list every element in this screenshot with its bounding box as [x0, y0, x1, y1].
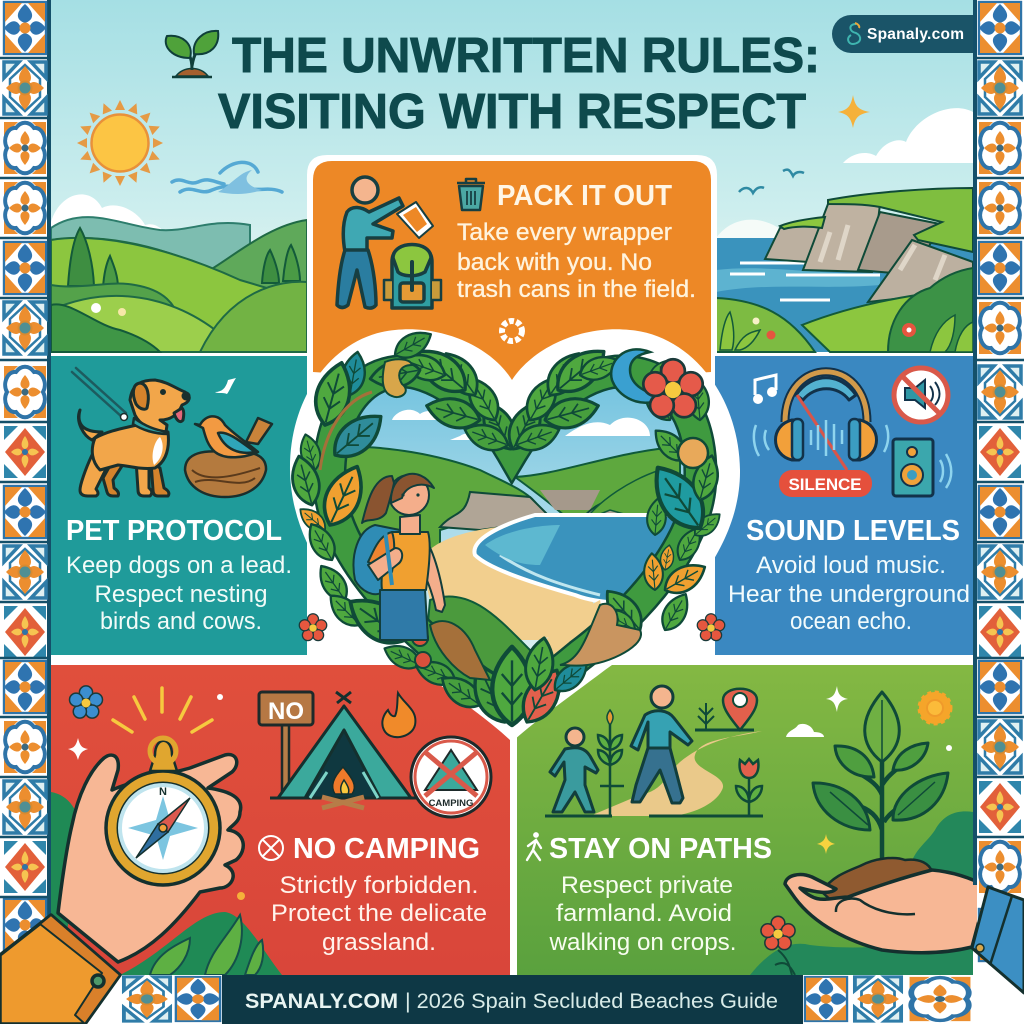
panel: pet protocol: birds and cows.	[100, 608, 262, 635]
panel: no camping: Protect the delicate	[271, 900, 487, 927]
icon: orange sun	[919, 692, 951, 724]
water	[474, 515, 700, 603]
icon: bottom flower	[761, 916, 795, 975]
wreath band	[329, 371, 700, 705]
icon: red flower	[299, 614, 327, 641]
panel: no camping: NO CAMPING	[293, 833, 480, 865]
icon: flower blue	[70, 686, 102, 718]
panel: pet protocol: Respect nesting	[94, 581, 268, 608]
wreath leaves	[287, 325, 725, 730]
icon: no camping badge: CAMPING	[429, 798, 473, 809]
panel: stay on paths: walking on crops.	[549, 929, 736, 956]
icon: crossed circle	[259, 836, 283, 860]
compass needle	[128, 786, 198, 860]
icon: trash can	[457, 179, 485, 210]
icon: open hand	[785, 870, 988, 953]
panel: sound levels: SOUND LEVELS	[746, 515, 960, 547]
panel: stay on paths: Respect private	[561, 872, 733, 899]
icon: tent	[270, 692, 420, 798]
foreground bush	[428, 596, 530, 672]
panel: stay on paths	[517, 665, 988, 975]
title: VISITING WITH RESPECT	[218, 85, 806, 139]
icon: hand with compass	[58, 738, 243, 962]
icon: shell	[383, 359, 412, 397]
icon: star	[838, 95, 870, 128]
panel: no camping: grassland.	[322, 929, 436, 956]
title	[218, 29, 820, 139]
panel: pet protocol: Keep dogs on a lead.	[66, 552, 292, 579]
cliffs	[440, 492, 553, 530]
compass rays	[113, 688, 212, 732]
compass needle: N	[159, 786, 167, 798]
icon: blue sleeve	[972, 887, 1024, 993]
icon: person and backpack	[337, 177, 441, 308]
right foreground	[716, 298, 815, 352]
icon: red flower right	[697, 614, 725, 641]
right clouds	[843, 108, 973, 163]
icon: flower mark	[502, 321, 522, 341]
sparkles and cloud	[826, 686, 848, 712]
sand	[427, 527, 594, 640]
panel: sound levels: Hear the underground	[728, 581, 970, 608]
icon: sun	[77, 100, 163, 186]
panel: sound levels: ocean echo.	[790, 608, 912, 635]
inner beach scene	[346, 388, 684, 672]
title: THE UNWRITTEN RULES:	[232, 29, 820, 83]
icon: headphones	[776, 372, 876, 470]
icon: walker	[527, 833, 541, 860]
right sea	[716, 238, 973, 352]
icon: walkers	[550, 686, 692, 812]
icon: music note	[755, 375, 776, 395]
icon: campfire	[322, 767, 364, 808]
icon: wave	[172, 162, 282, 194]
icon: tulip	[736, 759, 762, 816]
icon: sprout	[166, 31, 218, 77]
icon: no sign	[259, 692, 313, 795]
icon: bird on nest	[185, 416, 272, 497]
icon: path	[590, 731, 762, 816]
panel: pack it out: trash cans in the field.	[457, 276, 696, 303]
icon: wave in wreath	[611, 349, 666, 403]
panel: pack it out: PACK IT OUT	[497, 180, 672, 212]
right cliffs	[765, 218, 826, 262]
icon: orange sleeve	[0, 915, 120, 1024]
icon: no camping badge	[411, 737, 491, 817]
icon: dog on lead	[72, 368, 189, 496]
badge: Spanaly.com	[832, 15, 975, 53]
hill behind hand	[51, 792, 282, 975]
right hill	[516, 448, 681, 513]
icon: branch	[320, 392, 372, 470]
panel: pack it out: Take every wrapper	[457, 219, 672, 246]
icon: seedling	[813, 692, 948, 864]
panel: pack it out: back with you. No	[457, 249, 652, 276]
bird silhouette	[215, 378, 236, 394]
heart wreath frame	[287, 325, 740, 742]
icon: speaker box	[893, 439, 951, 496]
icon: pin	[698, 689, 757, 730]
panel: no camping	[51, 665, 510, 975]
panel: pack it out	[307, 155, 717, 385]
hiker woman	[354, 474, 445, 640]
icon: flame	[382, 693, 415, 737]
foreground leaves	[150, 915, 263, 975]
birds	[739, 170, 804, 193]
tile border: right column	[973, 0, 1024, 1024]
left clouds	[51, 194, 165, 232]
left landscape	[51, 217, 250, 352]
green bush	[750, 920, 973, 975]
panel: pet protocol: PET PROTOCOL	[66, 515, 282, 547]
panel: sky header	[51, 0, 973, 352]
left hill	[346, 446, 537, 548]
panel: pet protocol	[51, 356, 327, 655]
badge: Spanaly.com: Spanaly.com	[867, 26, 964, 43]
sound waves	[754, 420, 888, 456]
icon: driftwood	[560, 604, 641, 666]
icon: red flower	[643, 359, 703, 417]
silence label	[779, 470, 872, 497]
icon: muted speaker	[894, 368, 948, 422]
panel: stay on paths: STAY ON PATHS	[549, 833, 772, 865]
tile border: left column	[0, 0, 51, 1024]
footer bar: SPANALY.COM	[245, 990, 398, 1013]
icon: plant	[598, 710, 624, 816]
silence label: SILENCE	[788, 475, 862, 494]
panel: sound levels	[697, 356, 973, 655]
icon: soil	[822, 858, 932, 905]
footer bar: | 2026 Spain Secluded Beaches Guide	[405, 989, 778, 1013]
icon: no sign: NO	[268, 698, 304, 725]
panel: no camping: Strictly forbidden.	[280, 872, 478, 899]
footer bar	[51, 975, 973, 1024]
panel: sound levels: Avoid loud music.	[756, 552, 946, 579]
panel: stay on paths: farmland. Avoid	[556, 900, 732, 927]
